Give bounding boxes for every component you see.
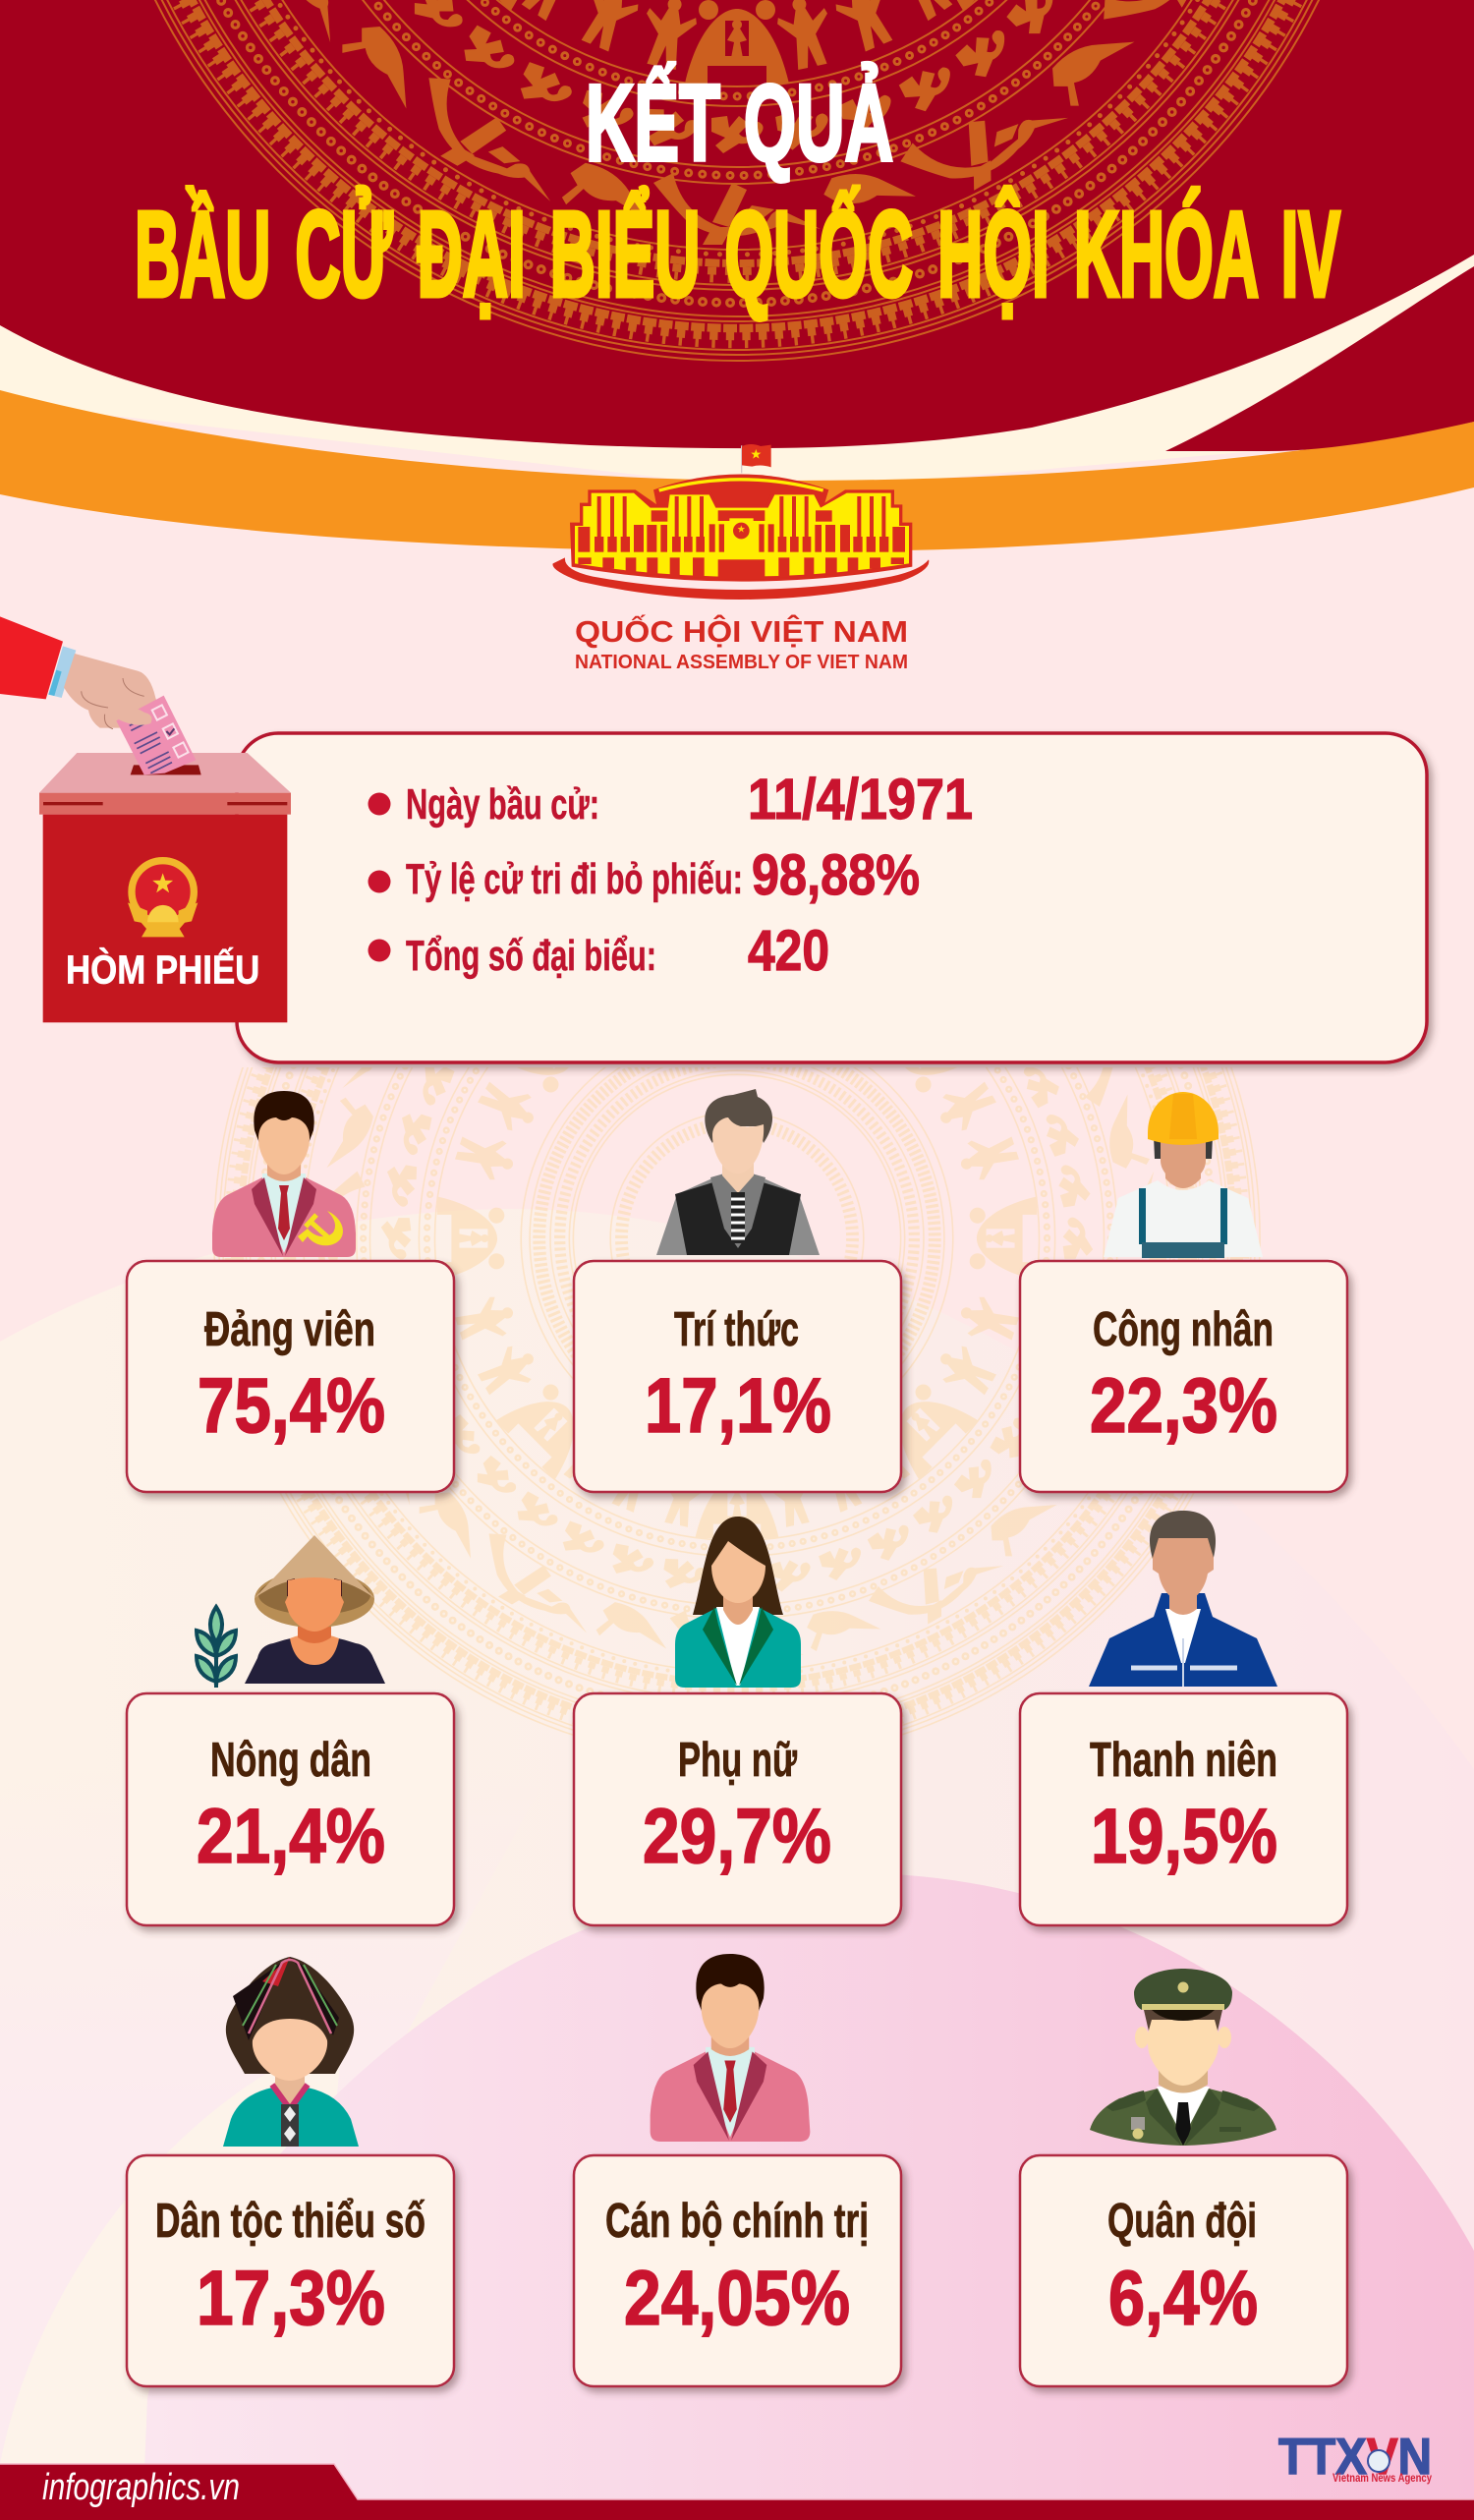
- panel: political cadres: 24,05%: [624, 2254, 850, 2341]
- panel: military: Quân đội: [1107, 2195, 1257, 2248]
- panel: ethnic minorities: 17,3%: [197, 2254, 385, 2341]
- icon: ballot paper: [82, 678, 196, 774]
- icon: soldier: [1090, 1969, 1276, 2146]
- panel: workers: 22,3%: [1090, 1361, 1277, 1449]
- icon: worker: [1104, 1092, 1263, 1258]
- text: number of deputies: [368, 919, 829, 983]
- text: website: infographics.vn: [42, 2467, 240, 2508]
- panel: farmers: [127, 1693, 454, 1925]
- panel: party members: 75,4%: [198, 1361, 385, 1449]
- panel: workers: [1020, 1261, 1347, 1492]
- icon: box: [39, 753, 291, 1022]
- text: voter turnout: [368, 843, 920, 907]
- icon: wheat plant: [197, 1607, 236, 1688]
- panel: ethnic minorities: [127, 2155, 454, 2386]
- text: number of deputies: 420: [748, 919, 829, 983]
- icon: flag: [741, 444, 771, 473]
- text: election date: Ngày bầu cử:: [406, 780, 599, 829]
- text: election date: 11/4/1971: [748, 768, 973, 831]
- logo caption: NATIONAL ASSEMBLY OF VIET NAM: [575, 652, 908, 673]
- icon: ethnic minority woman: [223, 1957, 359, 2147]
- logo: TTXVN: Vietnam News Agency: [1332, 2471, 1432, 2485]
- panel: political cadres: [574, 2155, 901, 2386]
- panel: ethnic minorities: Dân tộc thiểu số: [155, 2195, 425, 2248]
- text: election date: [368, 768, 973, 831]
- logo caption: QUỐC HỘI VIỆT NAM: [575, 613, 908, 649]
- panel: women: 29,7%: [643, 1792, 831, 1879]
- icon: hand: [64, 654, 161, 728]
- icon: political cadre: [651, 1954, 810, 2142]
- icon: ballot box with hand: [0, 616, 291, 1022]
- footer band: [0, 2464, 1474, 2520]
- panel: women: [574, 1693, 901, 1925]
- icon: building: [570, 474, 912, 582]
- text: ballot box: HÒM PHIẾU: [66, 947, 259, 993]
- panel: intellectuals: 17,1%: [645, 1361, 831, 1449]
- panel: youth: Thanh niên: [1090, 1734, 1277, 1787]
- panel: party members: Đảng viên: [204, 1303, 375, 1356]
- panel: farmers: 21,4%: [197, 1792, 385, 1879]
- panel: workers: Công nhân: [1093, 1303, 1274, 1356]
- panel: intellectuals: Trí thức: [674, 1303, 799, 1356]
- panel: farmers: Nông dân: [210, 1734, 371, 1787]
- icon: farmer: [245, 1535, 385, 1684]
- title: KẾT QUẢ: [586, 63, 893, 184]
- panel: military: [1020, 2155, 1347, 2386]
- logo: TTXVN: TTXVN: [1278, 2429, 1432, 2486]
- panel: party members: [127, 1261, 454, 1492]
- title: [135, 63, 1340, 322]
- panel: youth: [1020, 1693, 1347, 1925]
- text: voter turnout: 98,88%: [752, 843, 920, 907]
- panel: election summary: [237, 733, 1427, 1062]
- header banner: [0, 0, 1474, 551]
- icon: intellectual: [656, 1089, 820, 1255]
- panel: youth: 19,5%: [1091, 1792, 1277, 1879]
- panel: intellectuals: [574, 1261, 901, 1492]
- icon: base swoosh: [552, 557, 929, 600]
- icon: youth: [1089, 1511, 1277, 1687]
- watermark: bronze drum: [214, 1067, 1261, 1736]
- icon: party member: [212, 1091, 356, 1257]
- icon: woman: [675, 1517, 801, 1688]
- icon: national emblem: [128, 861, 198, 937]
- panel: military: 6,4%: [1108, 2254, 1258, 2341]
- text: number of deputies: Tổng số đại biểu:: [406, 932, 656, 980]
- icon: sleeve: [0, 616, 63, 699]
- logo: National Assembly building: [552, 444, 929, 600]
- panel: women: Phụ nữ: [678, 1734, 797, 1787]
- logo caption: [575, 613, 908, 673]
- text: voter turnout: Tỷ lệ cử tri đi bỏ phiếu:: [406, 855, 743, 903]
- panel: political cadres: Cán bộ chính trị: [605, 2195, 869, 2248]
